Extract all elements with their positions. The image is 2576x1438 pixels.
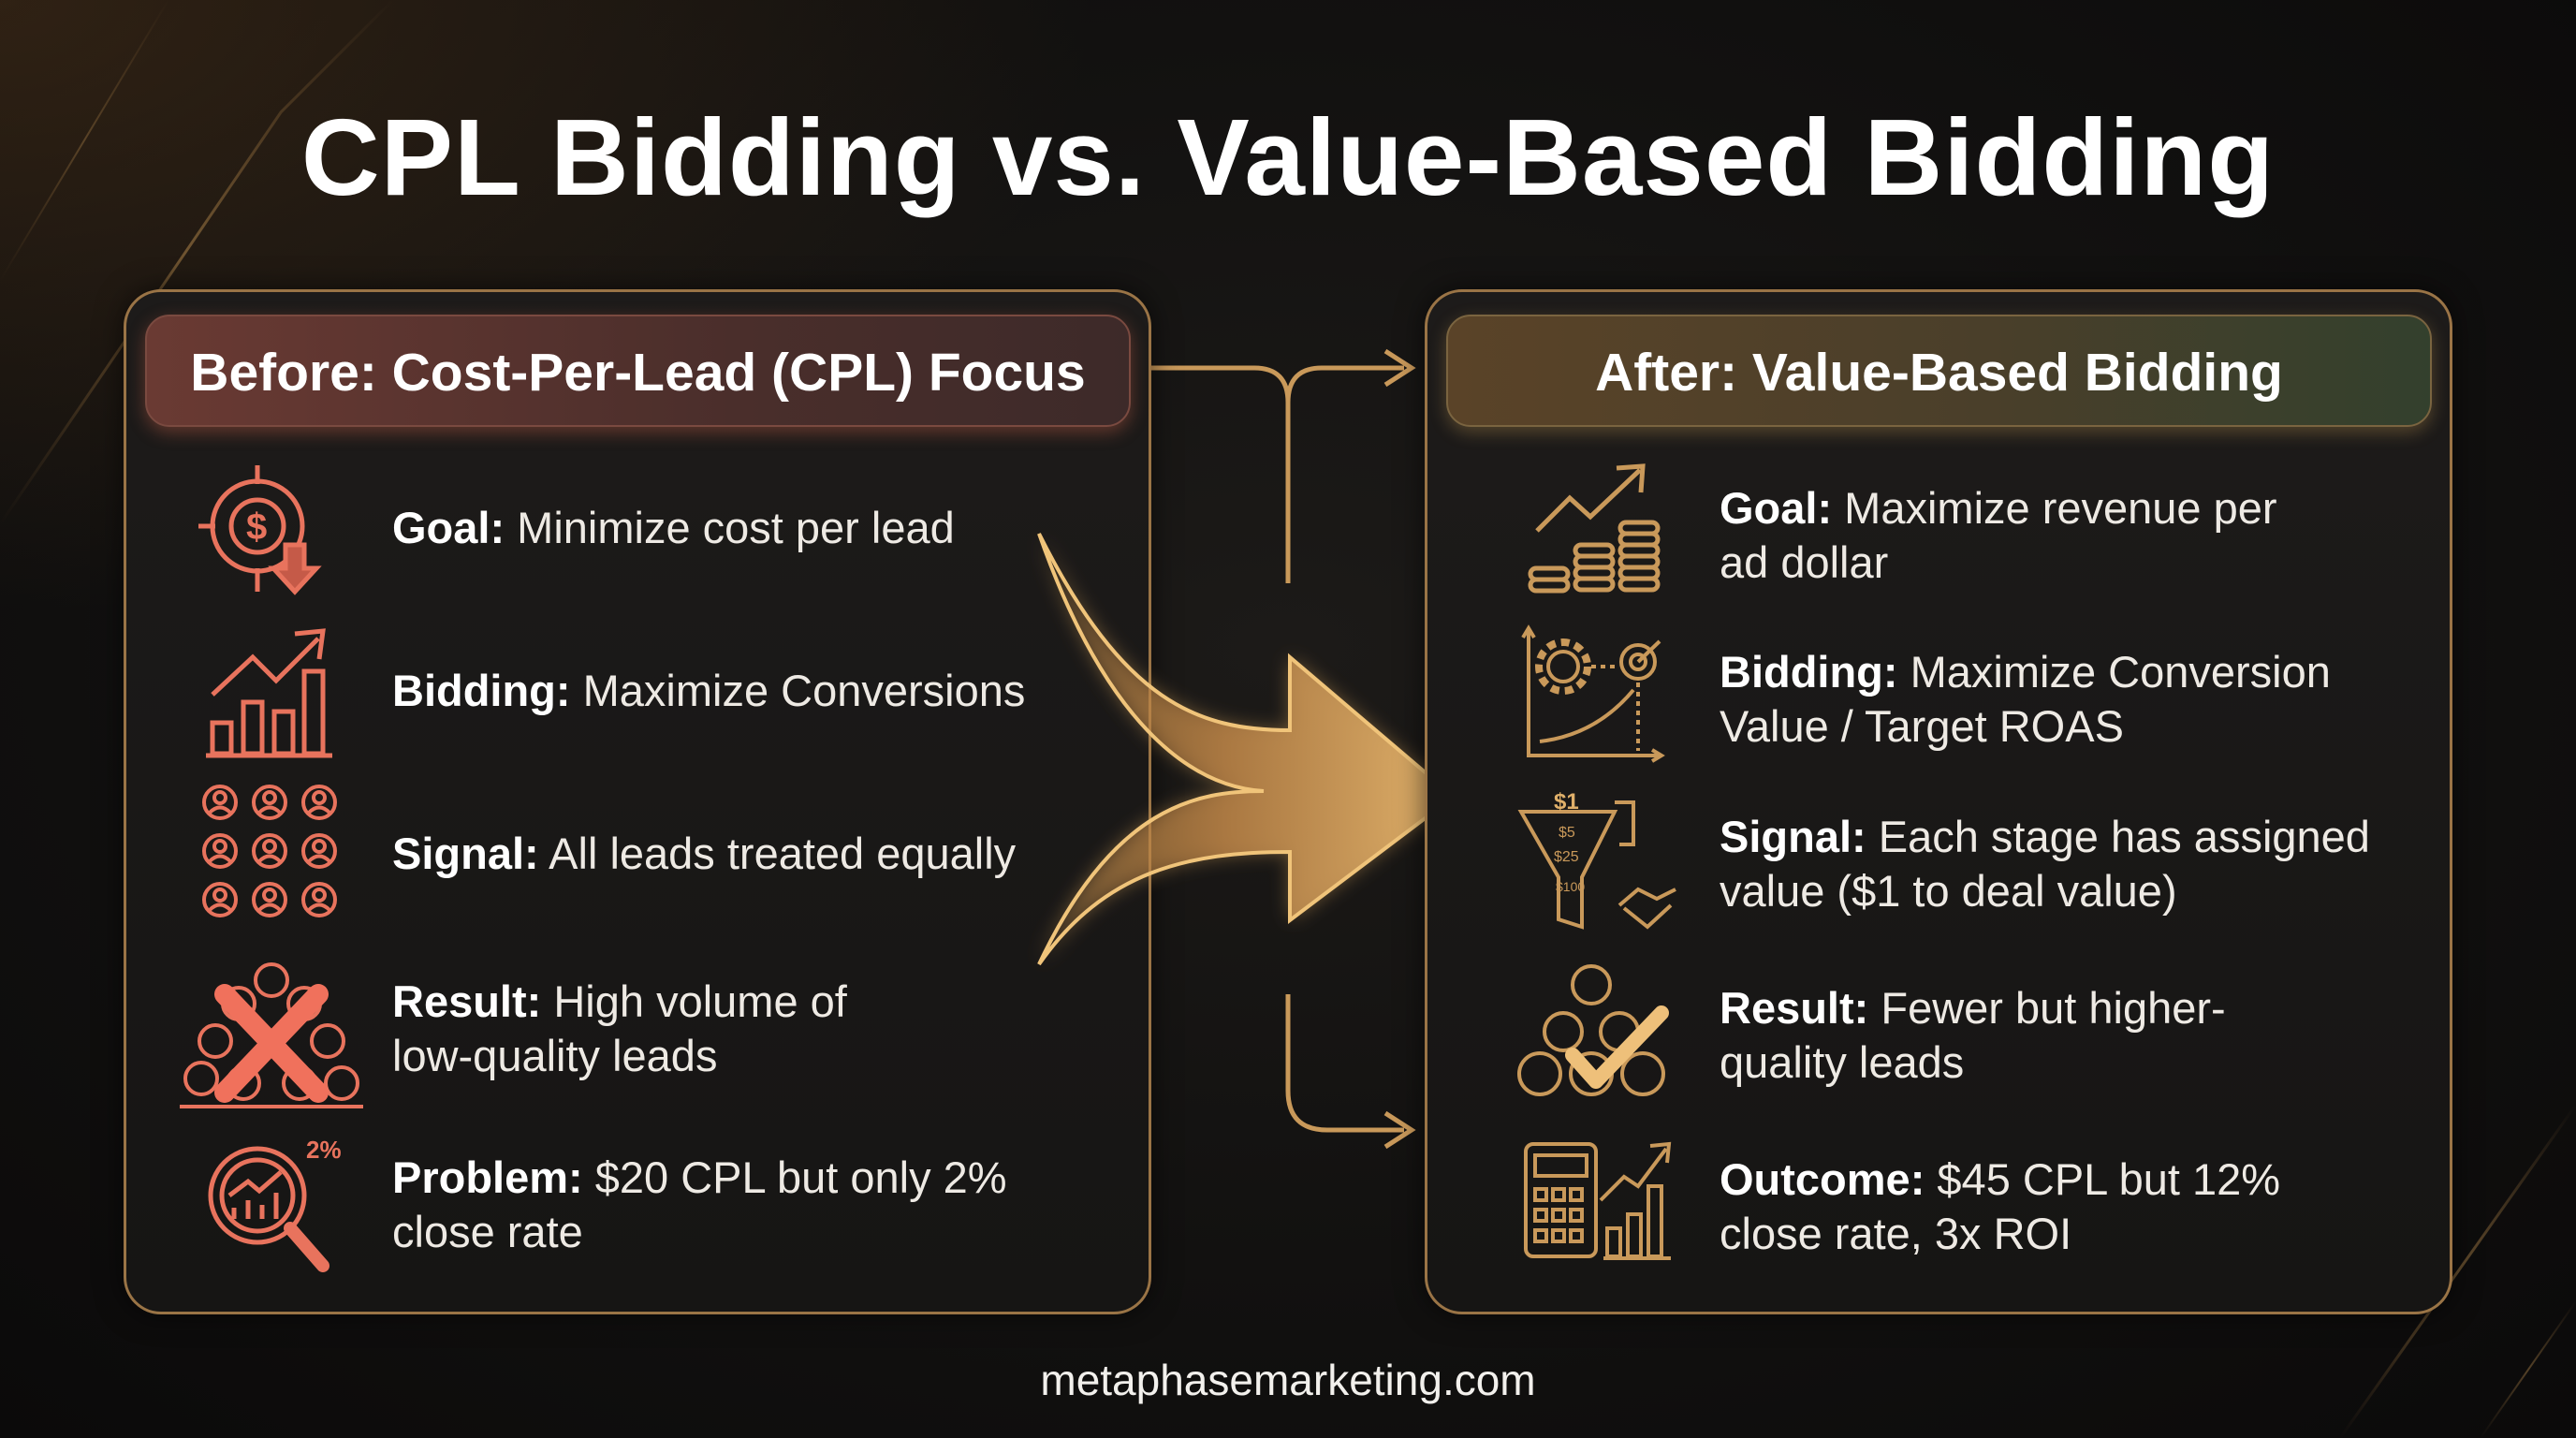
text: goal: Goal: Minimize cost per lead bbox=[392, 503, 955, 552]
icon: gear target chart bbox=[1521, 624, 1665, 763]
text: result: Result: High volume of bbox=[392, 976, 847, 1026]
header: before bbox=[145, 315, 1131, 427]
icon: coins growth bbox=[1528, 463, 1661, 594]
text: bidding: Value / Target ROAS bbox=[1720, 701, 2124, 751]
text: bidding bbox=[1720, 647, 2331, 751]
icon: dollar target down: $ bbox=[246, 506, 267, 548]
header: after: After: Value-Based Bidding bbox=[1595, 343, 2283, 403]
icon: value funnel: $25 bbox=[1554, 849, 1579, 865]
text: bidding: Bidding: Maximize Conversion bbox=[1720, 647, 2331, 697]
text: result: Result: Fewer but higher- bbox=[1720, 983, 2226, 1033]
text: signal: Signal: All leads treated equally bbox=[392, 829, 1016, 878]
text: signal: Signal: Each stage has assigned bbox=[1720, 812, 2370, 861]
icon: value funnel: $5 bbox=[1559, 825, 1575, 841]
text: outcome: close rate, 3x ROI bbox=[1720, 1209, 2071, 1258]
icon: calculator chart bbox=[1524, 1142, 1672, 1260]
text: goal bbox=[1720, 483, 2277, 587]
icon: crowd with X bbox=[180, 962, 363, 1108]
text: result bbox=[1720, 983, 2226, 1087]
text: problem bbox=[392, 1152, 1007, 1256]
icon: grid of people bbox=[202, 785, 337, 917]
big glowing arrow bbox=[1037, 533, 1425, 966]
text: result: low-quality leads bbox=[392, 1031, 717, 1080]
text: bidding: Bidding: Maximize Conversions bbox=[392, 666, 1025, 715]
text: result bbox=[392, 976, 847, 1080]
header: before: Before: Cost-Per-Lead (CPL) Focus bbox=[190, 343, 1086, 403]
panel: before bbox=[124, 289, 1151, 1314]
text: problem: Problem: $20 CPL but only 2% bbox=[392, 1152, 1007, 1202]
text: outcome bbox=[1720, 1154, 2280, 1258]
text: result: quality leads bbox=[1720, 1037, 1964, 1087]
connector arrows bbox=[1151, 348, 1415, 1150]
icon: value funnel: $1 bbox=[1554, 789, 1579, 814]
icon: bar chart up bbox=[206, 628, 332, 758]
icon: magnifier 2% bbox=[208, 1136, 342, 1272]
footer url: metaphasemarketing.com bbox=[1040, 1356, 1536, 1404]
text: goal: ad dollar bbox=[1720, 537, 1888, 587]
icon: magnifier 2%: 2% bbox=[306, 1136, 342, 1164]
icon: dollar target down bbox=[198, 465, 322, 595]
text: signal bbox=[1720, 812, 2370, 916]
text: problem: close rate bbox=[392, 1207, 583, 1256]
icon: value funnel: $100 bbox=[1556, 879, 1585, 894]
panel: after bbox=[1425, 289, 2452, 1314]
text: outcome: Outcome: $45 CPL but 12% bbox=[1720, 1154, 2280, 1204]
icon: value funnel bbox=[1518, 789, 1676, 930]
text: goal: Goal: Maximize revenue per bbox=[1720, 483, 2277, 533]
title: CPL Bidding vs. Value-Based Bidding bbox=[301, 96, 2275, 218]
icon: people with check bbox=[1517, 964, 1669, 1096]
text: signal: value ($1 to deal value) bbox=[1720, 866, 2177, 916]
header: after bbox=[1446, 315, 2432, 427]
